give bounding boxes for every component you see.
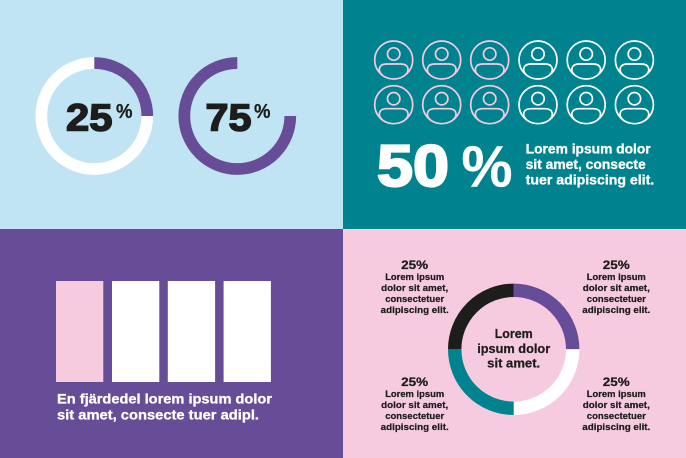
text block: people description: tuer adipiscing elit. <box>526 172 654 188</box>
donut center label: sit amet. <box>487 356 540 370</box>
callout: top right: Lorem ipsum <box>587 272 646 283</box>
callout: top right: dolor sit amet, <box>583 283 650 294</box>
ring chart: 25 percent <box>41 63 147 169</box>
callout: bottom left: adipiscing elit. <box>381 422 449 433</box>
callout: top right: 25% <box>603 258 630 272</box>
icon: person row 2 column 2 <box>423 86 461 124</box>
callout: top right: adipiscing elit. <box>582 305 650 316</box>
callout: bottom right <box>582 375 650 433</box>
icon grid: twelve people <box>375 41 653 124</box>
donut chart: four equal segments <box>455 290 573 408</box>
panel: one quarter bars <box>0 229 343 458</box>
ring chart: 75 percent <box>184 63 290 169</box>
icon: person row 1 column 5 <box>567 41 605 79</box>
callout: top left: adipiscing elit. <box>381 305 449 316</box>
text block: bars description: En fjärdedel lorem ipsum dolor <box>57 392 273 406</box>
text block: bars description: sit amet, consecte tuer adipl. <box>57 408 259 422</box>
icon: person row 1 column 4 <box>519 41 557 79</box>
callout: top left: consectetuer <box>385 294 444 305</box>
donut center label: Lorem <box>495 326 533 341</box>
bar chart: one of four highlighted <box>56 281 271 382</box>
callout: bottom right: adipiscing elit. <box>582 422 650 433</box>
callout: bottom right: consectetuer <box>587 411 646 422</box>
text block: people description <box>526 142 654 188</box>
label: 75 percent <box>206 98 271 140</box>
callout: top right <box>582 258 650 316</box>
callout: bottom right: 25% <box>603 375 630 389</box>
text block: people description: Lorem ipsum dolor <box>526 142 651 156</box>
callout: bottom right: Lorem ipsum <box>587 389 646 400</box>
callout: top left: dolor sit amet, <box>381 283 448 294</box>
icon: person row 1 column 3 <box>471 41 509 79</box>
callout: top left: Lorem ipsum <box>385 272 444 283</box>
callout: top left <box>381 258 449 316</box>
label: 75 percent: % <box>254 101 271 123</box>
label: 25 percent <box>66 98 133 140</box>
icon: person row 1 column 1 <box>375 41 413 79</box>
icon: person row 2 column 4 <box>519 86 557 124</box>
panel: people statistic <box>343 0 686 229</box>
panel: four-part donut <box>343 229 686 458</box>
callout: top right: consectetuer <box>587 294 646 305</box>
callout: top left: 25% <box>401 258 429 272</box>
icon: person row 2 column 1 <box>375 86 413 124</box>
donut center label: ipsum dolor <box>477 341 550 356</box>
big number: 50 percent: % <box>462 134 512 200</box>
label: 75 percent: 75 <box>206 98 252 140</box>
label: 25 percent: 25 <box>66 98 112 140</box>
text block: people description: sit amet, consecte <box>526 157 646 172</box>
panel: percentage rings <box>0 0 343 229</box>
text block: bars description <box>57 392 273 422</box>
icon: person row 1 column 2 <box>423 41 461 79</box>
icon: person row 1 column 6 <box>615 41 653 79</box>
icon: person row 2 column 3 <box>471 86 509 124</box>
donut center label <box>477 326 550 370</box>
big number: 50 percent <box>377 134 512 200</box>
icon: person row 2 column 6 <box>615 86 653 124</box>
callout: bottom left: consectetuer <box>385 411 444 422</box>
callout: bottom left <box>381 375 449 433</box>
big number: 50 percent: 50 <box>377 134 449 199</box>
icon: person row 2 column 5 <box>567 86 605 124</box>
callout: bottom right: dolor sit amet, <box>583 400 650 411</box>
callout: bottom left: 25% <box>401 375 429 389</box>
callout: bottom left: Lorem ipsum <box>385 389 444 400</box>
callout: bottom left: dolor sit amet, <box>381 400 448 411</box>
label: 25 percent: % <box>116 101 133 123</box>
